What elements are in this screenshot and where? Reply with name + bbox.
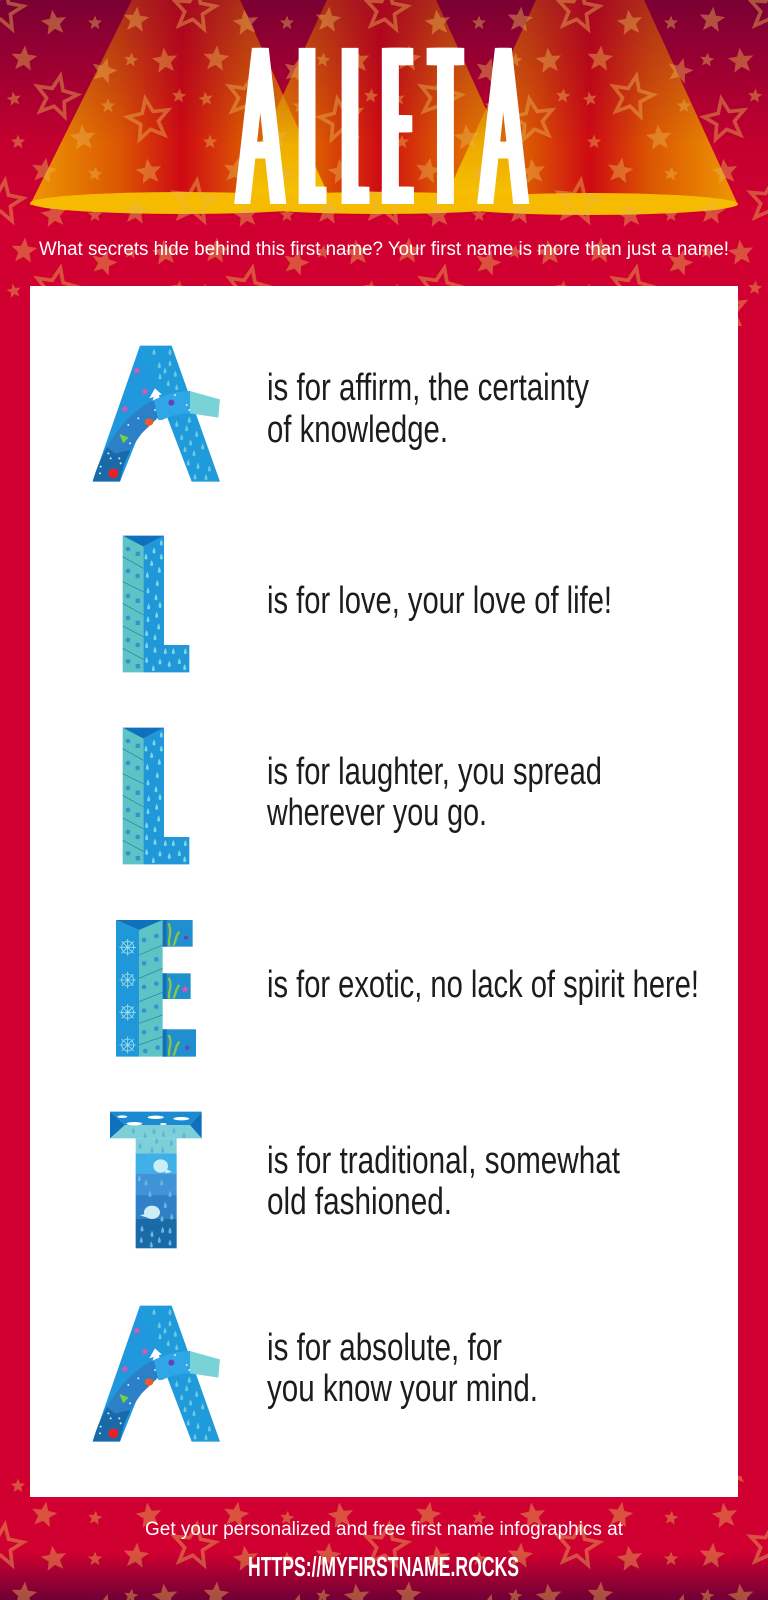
- title: E: [386, 0, 409, 253]
- subtitle: What secrets hide behind this first name? Your first name is more than just a name!: [39, 239, 729, 260]
- star pattern: footer: [0, 1476, 768, 1600]
- panel: white content card: [30, 286, 738, 1497]
- spotlight beams: [30, 0, 738, 215]
- text: T line: old fashioned.: [267, 1181, 452, 1223]
- star pattern: header: [0, 0, 768, 326]
- text: second A line: you know your mind.: [267, 1368, 538, 1410]
- icon: letter T: [110, 1112, 202, 1248]
- title: L: [346, 0, 364, 253]
- text: T line: is for traditional, somewhat: [267, 1140, 620, 1182]
- text: A line: is for affirm, the certainty: [267, 367, 589, 409]
- text: second L line: is for laughter, you spread: [267, 751, 602, 793]
- text: second L line: wherever you go.: [266, 792, 487, 834]
- icon: letter E: [116, 920, 196, 1057]
- title: T: [432, 0, 458, 253]
- title: [234, 0, 530, 253]
- title: L: [303, 0, 321, 253]
- text: second A line: is for absolute, for: [267, 1327, 502, 1369]
- icon: letter L: [123, 536, 189, 672]
- footer text: Get your personalized and free first name infographics at: [145, 1519, 624, 1540]
- icon: letter A: [83, 346, 227, 487]
- title: A: [239, 0, 281, 253]
- icon: letter L second: [123, 728, 189, 864]
- text: L line: is for love, your love of life!: [267, 580, 612, 622]
- title: A: [482, 0, 524, 253]
- icon: letter A second: [83, 1306, 227, 1447]
- text: A line: of knowledge.: [267, 409, 448, 451]
- footer url: HTTPS://MYFIRSTNAME.ROCKS: [248, 1551, 519, 1582]
